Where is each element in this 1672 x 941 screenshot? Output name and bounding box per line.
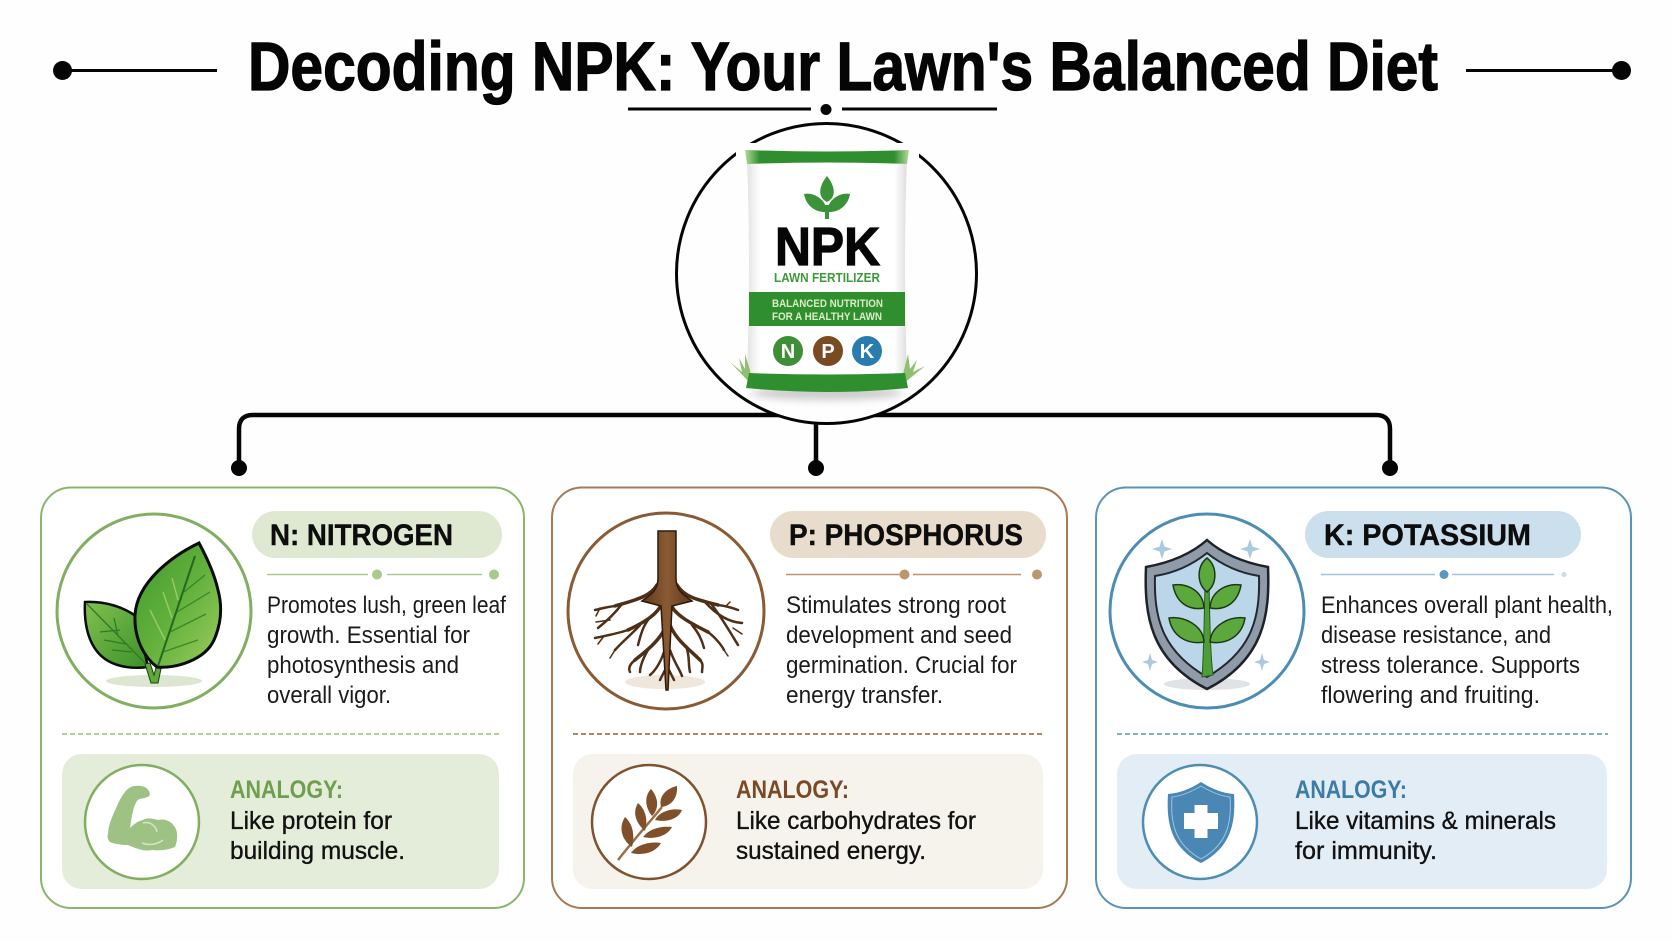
icon: fertilizer bag: BALANCED NUTRITION <box>772 298 883 310</box>
callout: nitrogen analogy <box>62 754 499 889</box>
icon: fertilizer bag: P <box>821 341 835 363</box>
icon: fertilizer bag: K <box>860 341 875 363</box>
text block: potassium description: disease resistance, and <box>1321 622 1551 649</box>
text block: phosphorus description: Stimulates strong root <box>786 592 1006 619</box>
title underline <box>628 104 997 115</box>
heading pill: nitrogen: N: NITROGEN <box>270 519 453 552</box>
text block: phosphorus description: germination. Crucial for <box>786 652 1017 679</box>
icon: medical shield <box>1143 765 1257 879</box>
panel: potassium <box>1096 488 1631 908</box>
heading pill: phosphorus <box>770 511 1046 558</box>
heading pill: potassium: K: POTASSIUM <box>1324 519 1531 552</box>
callout: potassium analogy: for immunity. <box>1295 837 1437 865</box>
callout: nitrogen analogy: Like protein for <box>230 807 392 835</box>
icon: flexed arm <box>85 765 199 879</box>
callout: potassium analogy: Like vitamins & minerals <box>1295 807 1556 835</box>
text block: nitrogen description <box>267 592 506 709</box>
product circle with fertilizer bag <box>676 124 976 424</box>
heading pill: potassium <box>1305 511 1581 558</box>
callout: potassium analogy <box>1117 754 1607 889</box>
callout: phosphorus analogy: ANALOGY: <box>736 776 849 804</box>
panel: nitrogen <box>41 488 524 908</box>
icon: fertilizer bag: FOR A HEALTHY LAWN <box>772 311 882 323</box>
text block: potassium description: stress tolerance. Supports <box>1321 652 1580 679</box>
text block: nitrogen description: growth. Essential for <box>267 622 470 649</box>
icon: grain sprig <box>592 765 706 879</box>
text block: nitrogen description: overall vigor. <box>267 682 391 709</box>
icon: bag sprout logo <box>804 176 850 219</box>
text block: phosphorus description: energy transfer. <box>786 682 943 709</box>
text block: potassium description: flowering and fruiting. <box>1321 682 1540 709</box>
icon: shield with plant <box>1110 514 1304 708</box>
title right ornament <box>1466 61 1631 80</box>
connector lines <box>231 415 1398 476</box>
icon: fertilizer bag: N <box>781 341 795 363</box>
callout: nitrogen analogy: building muscle. <box>230 837 405 865</box>
heading pill: nitrogen <box>252 511 502 558</box>
panel: phosphorus <box>552 488 1067 908</box>
icon: fertilizer bag: NPK <box>775 217 880 277</box>
callout: phosphorus analogy <box>573 754 1043 889</box>
text block: nitrogen description: photosynthesis and <box>267 652 459 679</box>
callout: potassium analogy: ANALOGY: <box>1295 776 1407 804</box>
icon: plant roots <box>568 513 764 709</box>
heading pill: phosphorus: P: PHOSPHORUS <box>789 519 1023 552</box>
callout: phosphorus analogy: sustained energy. <box>736 837 926 865</box>
icon: fertilizer bag <box>730 150 925 400</box>
text block: phosphorus description: development and seed <box>786 622 1012 649</box>
title left ornament <box>53 61 217 80</box>
callout: phosphorus analogy: Like carbohydrates for <box>736 807 976 835</box>
text block: potassium description <box>1321 592 1613 709</box>
callout: nitrogen analogy: ANALOGY: <box>230 776 343 804</box>
text block: nitrogen description: Promotes lush, green leaf <box>267 592 506 619</box>
text block: potassium description: Enhances overall plant health, <box>1321 592 1613 619</box>
text block: phosphorus description <box>786 592 1017 709</box>
icon: green leaves <box>57 514 251 708</box>
title: Decoding NPK: Your Lawn's Balanced Diet <box>248 28 1438 105</box>
icon: fertilizer bag: LAWN FERTILIZER <box>774 270 881 285</box>
